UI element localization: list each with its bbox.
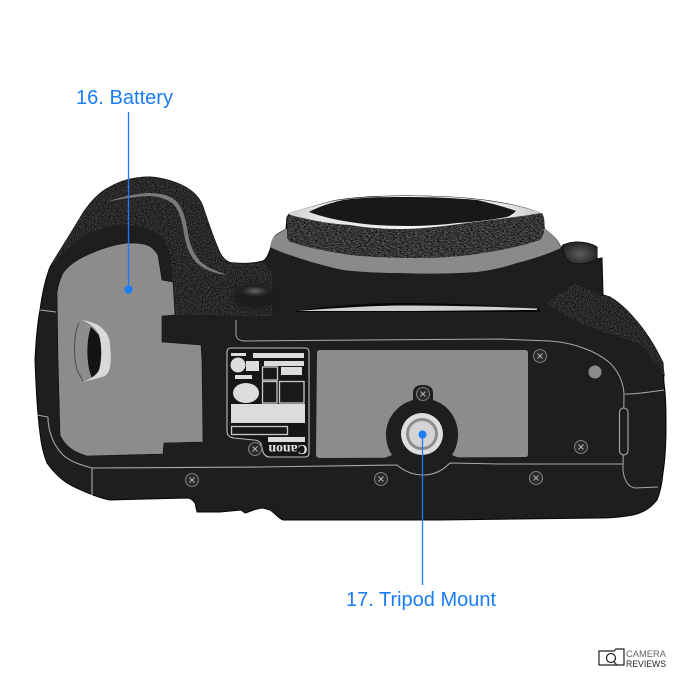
battery leader dot: [124, 286, 132, 294]
button highlight: [240, 286, 270, 296]
screw hole dot: [588, 366, 602, 378]
tripod leader dot: [418, 430, 426, 438]
battery door: [57, 243, 203, 456]
top button: [233, 285, 277, 309]
body highlight sliver: [296, 303, 540, 312]
callout: battery: [76, 87, 173, 294]
latch light rim: [82, 320, 111, 382]
tripod socket surround: [382, 385, 462, 459]
latch dark recess: [87, 327, 104, 378]
battery leader line: [128, 112, 130, 290]
side oval: [620, 408, 628, 455]
label outlined boxes: [232, 367, 304, 434]
latch thin arc: [75, 323, 83, 381]
screws: [186, 350, 588, 486]
grip highlight arc: [107, 193, 228, 275]
main plate seam: [236, 320, 658, 488]
mount plate: [316, 350, 528, 458]
tripod mount: [401, 413, 443, 455]
lens mount ring texture: [287, 213, 545, 258]
mount outer disc: [401, 413, 443, 455]
logo word REVIEWS: REVIEWS: [626, 659, 666, 670]
lens mount opening: [309, 197, 516, 226]
body silhouette: [35, 177, 666, 520]
battery door latch: [75, 320, 111, 382]
camera info label: [227, 348, 309, 457]
bottom plate seam: [37, 310, 623, 495]
callout: tripod mount: [346, 430, 496, 611]
tripod heading: 17. Tripod Mount: [346, 589, 496, 611]
logo: Camera Reviews: [599, 649, 667, 670]
Canon logo: Canon: [268, 441, 308, 456]
right dial: [563, 242, 597, 264]
shoulder plate: [270, 228, 561, 274]
textured grip: [50, 177, 272, 316]
label blocks: [230, 353, 305, 442]
tripod leader line: [422, 434, 424, 585]
logo word CAMERA: CAMERA: [626, 649, 667, 660]
lens mount rim: [288, 196, 542, 229]
camera body: [35, 170, 670, 520]
battery heading: 16. Battery: [76, 87, 173, 109]
infographic: camera bottom view: [34, 90, 666, 667]
mount inner ring: [408, 420, 436, 448]
right textured grip: [547, 283, 665, 377]
button shadow: [233, 285, 277, 309]
label outline: [227, 348, 309, 457]
seam lines: [37, 310, 664, 495]
logo camera icon: [599, 649, 624, 665]
sliver light: [298, 306, 537, 311]
right grip seam: [625, 390, 664, 394]
sliver shadow: [296, 303, 540, 312]
